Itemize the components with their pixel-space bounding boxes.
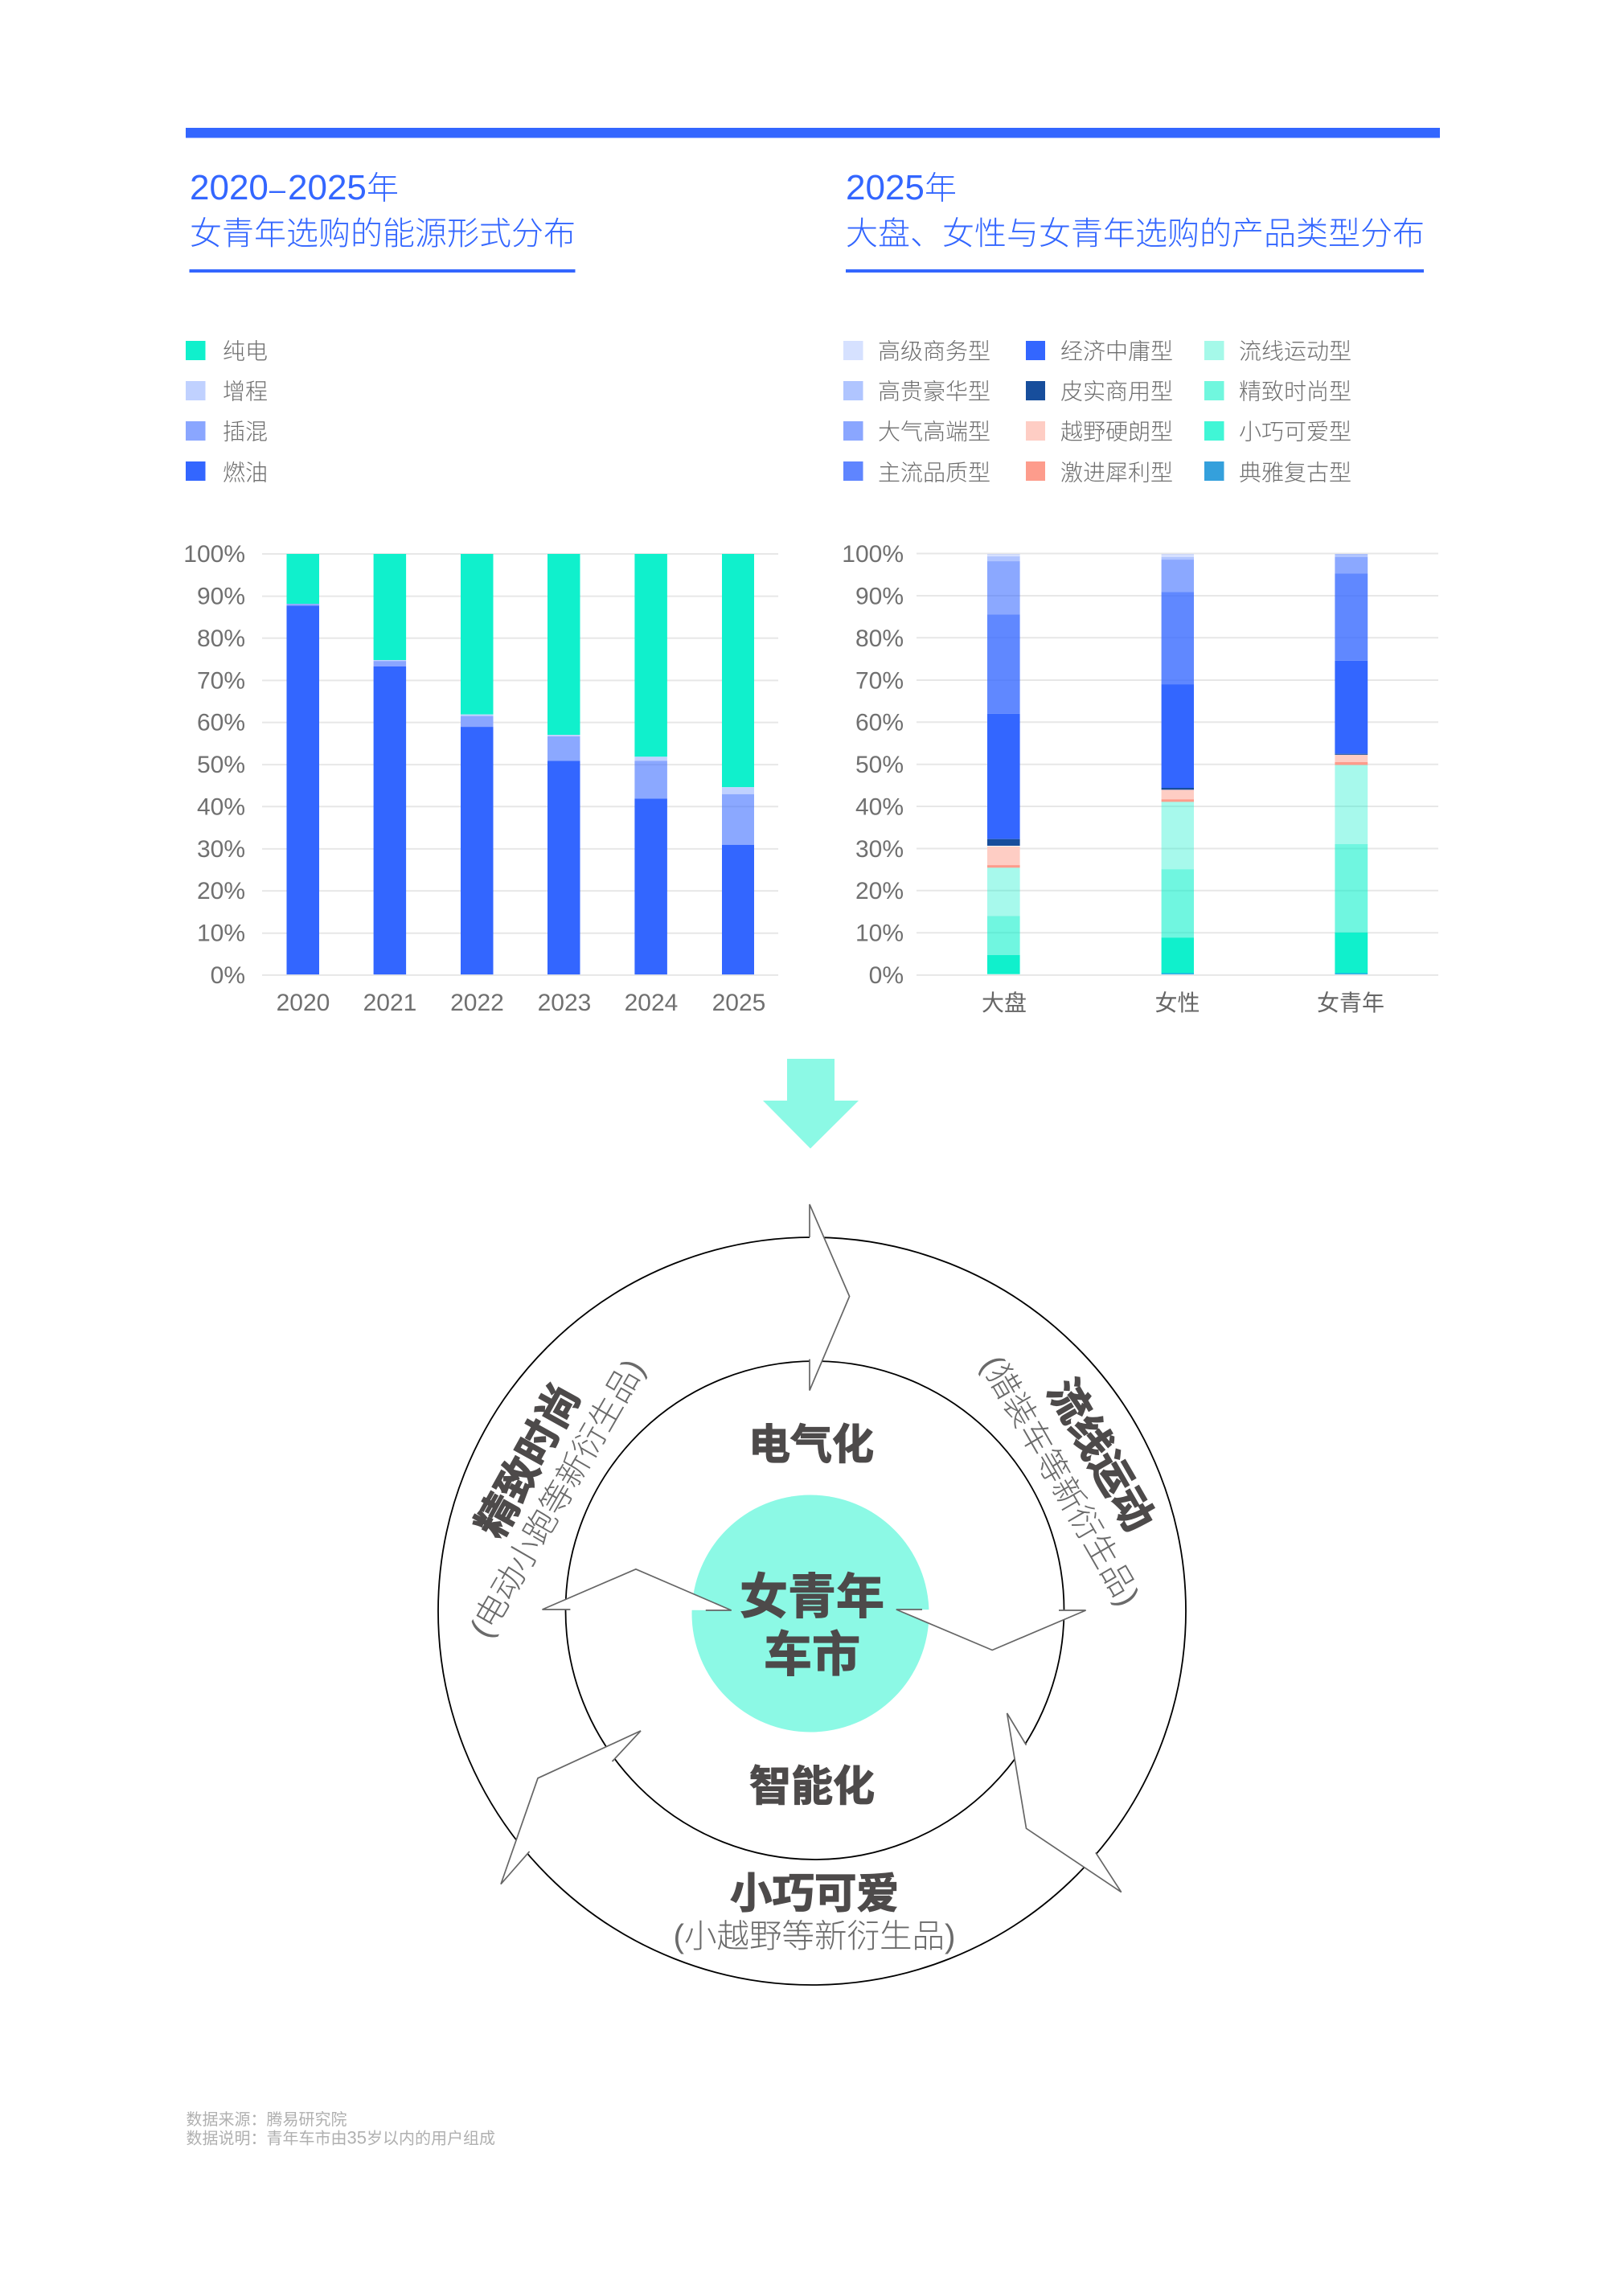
bar: 2023 [547,554,580,974]
bar: 大盘 [987,554,1020,974]
outer ring [438,1237,1186,1985]
legend: energy types: 纯电 [223,339,268,364]
axis labels: left y axis: 20% [197,878,245,904]
axis labels: left y axis: 90% [197,584,245,610]
label: 电动小跑 sub: (电动小跑等新衍生品) [462,1352,652,1644]
heading: right chart title: 2025 [846,168,925,207]
footnote [187,2110,495,2148]
heading: left chart title: 女青年选购的能源形式分布 [190,216,576,252]
label: center 女青年车市: 女青年 [740,1570,884,1624]
legend: product types: 高级商务型 [878,339,990,364]
heading: left chart title: 年 [367,170,399,206]
axis labels: groups: 女青年 [1317,990,1384,1015]
heading: left chart title: 2020 [190,168,269,207]
axis labels: left y axis [183,541,245,989]
legend: product types: 小巧可爱型 [1239,420,1351,445]
label: center 女青年车市: 车市 [764,1628,860,1682]
bar: 2020 [286,554,319,974]
diagram: concentric circles with arrows [438,1204,1186,1985]
legend: energy types: 插混 [223,420,268,445]
bar: 2021 [374,554,406,974]
axis labels: left y axis: 10% [197,921,245,947]
legend: product types: 高贵豪华型 [878,379,990,404]
bar: 女性 [1162,554,1194,974]
inner ring [566,1361,1064,1860]
axis labels: right y axis: 100% [842,541,904,568]
axis labels: right y axis: 80% [855,625,904,652]
label: center 女青年车市 [740,1570,884,1682]
axis labels: years [277,990,765,1016]
label: 小越野 sub: (小越野等新衍生品) [674,1917,955,1954]
legend: product types: 经济中庸型 [1060,339,1173,364]
legend: product types [843,339,1351,486]
label: 智能化: 智能化 [749,1764,875,1810]
bar: 2022 [461,554,494,974]
label: 精致时尚: 精致时尚 [468,1376,589,1545]
legend: product types: 激进犀利型 [1060,461,1173,486]
legend: product types: 皮实商用型 [1060,379,1173,404]
axis labels: right y axis: 20% [855,878,904,904]
heading: left chart title: – [269,173,285,206]
label: 小巧可爱: 小巧可爱 [730,1870,899,1917]
axis labels: years: 2022 [450,990,504,1016]
heading: left chart title [190,168,576,273]
axis labels: left y axis: 80% [197,625,245,652]
legend: energy types: 燃油 [223,461,268,486]
footnote: 数据说明：青年车市由35岁以内的用户组成 [187,2127,495,2148]
axis labels: right y axis: 40% [855,793,904,820]
label: 猎装车 sub: (猎装车等新衍生品) [974,1349,1147,1612]
axis labels: groups: 大盘 [982,990,1027,1015]
axis labels: left y axis: 0% [211,962,245,989]
arrow: right [896,1610,1086,1650]
axis labels: right y axis: 60% [855,710,904,736]
legend: product types: 越野硬朗型 [1060,420,1173,445]
chart: product type stacked bars [842,541,1438,1015]
bar: 2024 [634,554,667,974]
axis labels: left y axis: 100% [183,541,245,568]
legend: energy types [186,339,268,486]
heading: left chart title: 2025 [288,168,367,207]
legend: product types: 大气高端型 [878,420,990,445]
legend: product types: 典雅复古型 [1239,461,1351,486]
arrow: down to diagram [763,1059,859,1149]
arrow: top [810,1204,850,1391]
axis labels: left y axis: 40% [197,793,245,820]
axis labels: right y axis: 50% [855,752,904,778]
axis labels: years: 2020 [277,990,330,1016]
label: 流线运动: 流线运动 [1038,1372,1163,1540]
center circle [691,1495,929,1732]
axis labels: years: 2025 [712,990,765,1016]
axis labels: right y axis: 90% [855,584,904,610]
axis labels: right y axis: 0% [869,962,904,989]
arrow: left [542,1569,732,1610]
axis labels: left y axis: 60% [197,710,245,736]
heading: right chart title [846,168,1425,273]
arrow: bottom left [501,1731,641,1884]
axis labels: right y axis: 30% [855,836,904,863]
bar: 2025 [722,554,754,974]
heading: right chart title: 大盘、女性与女青年选购的产品类型分布 [846,216,1425,252]
axis labels: right y axis: 10% [855,921,904,947]
footnote: 数据来源：腾易研究院 [187,2110,347,2129]
axis labels: years: 2023 [538,990,591,1016]
top accent bar [186,128,1440,138]
chart: energy type stacked bars [183,541,778,1016]
bar: 女青年 [1335,554,1368,974]
axis labels: right y axis: 70% [855,667,904,694]
axis labels: left y axis: 50% [197,752,245,778]
legend: energy types: 增程 [223,379,268,404]
arrow: bottom right [1007,1713,1122,1892]
axis labels: years: 2021 [363,990,416,1016]
axis labels: right y axis [842,541,904,989]
label: 电气化: 电气化 [748,1422,874,1469]
legend: product types: 流线运动型 [1239,339,1351,364]
axis labels: groups [982,990,1384,1015]
heading: right chart title: 年 [925,170,957,206]
axis labels: left y axis: 70% [197,667,245,694]
legend: product types: 精致时尚型 [1239,379,1351,404]
legend: product types: 主流品质型 [878,461,990,486]
axis labels: groups: 女性 [1154,990,1200,1015]
axis labels: left y axis: 30% [197,836,245,863]
axis labels: years: 2024 [625,990,678,1016]
